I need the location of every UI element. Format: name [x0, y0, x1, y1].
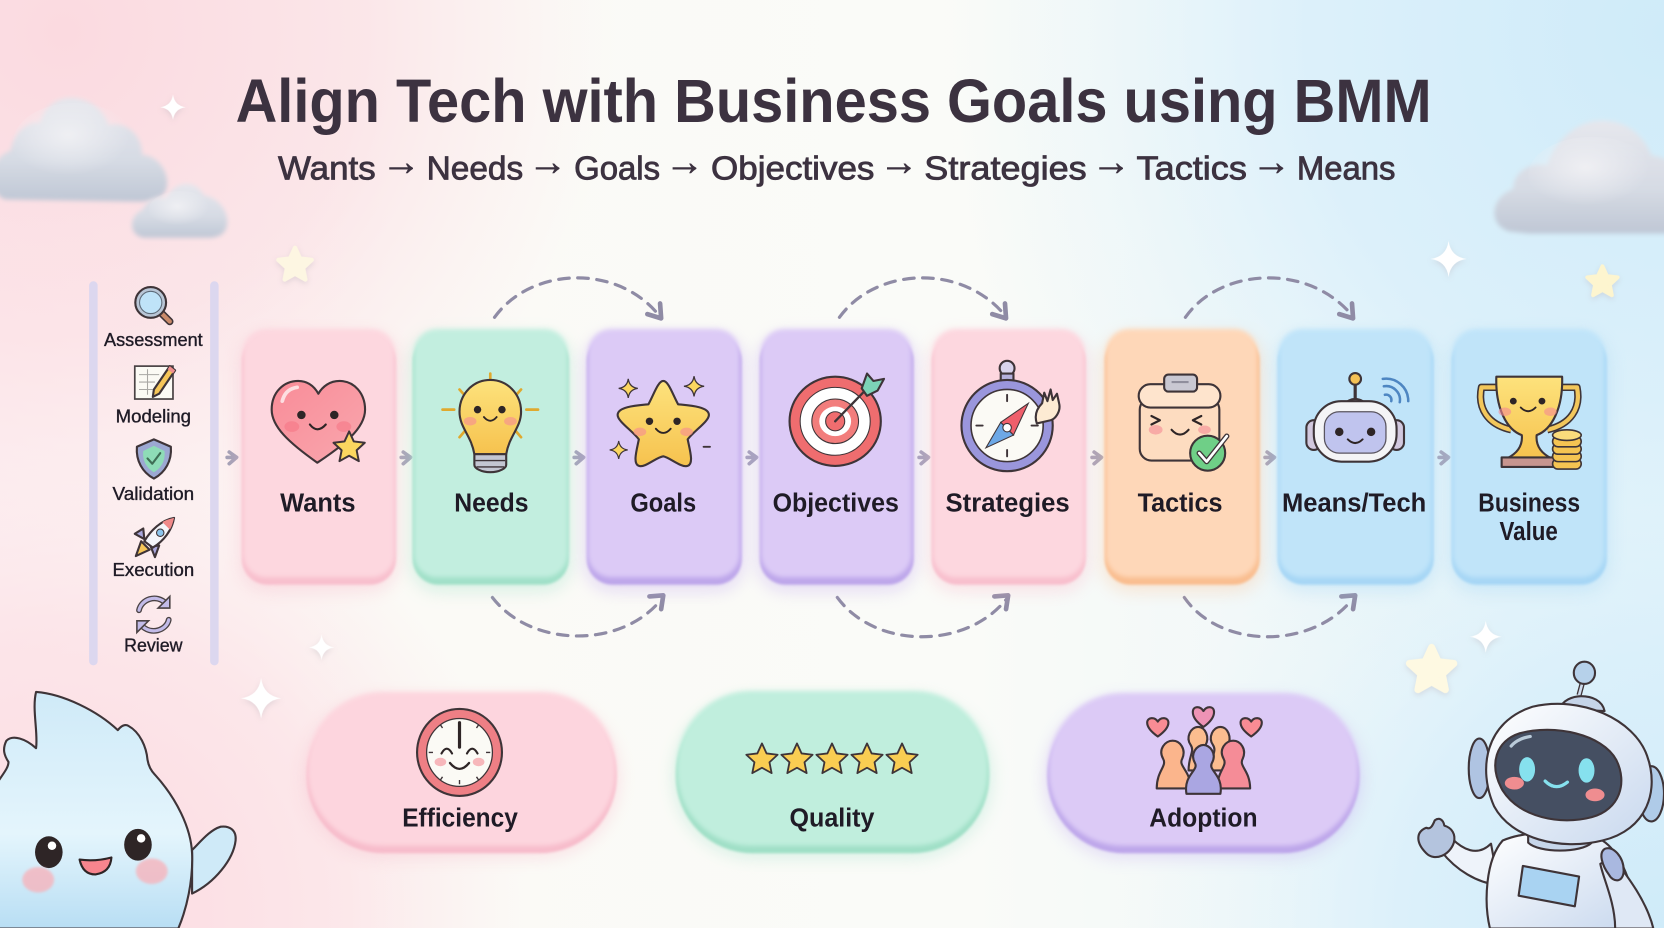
subtitle: chain: → [528, 140, 567, 184]
subtitle: chain: Wants [278, 149, 376, 186]
robot right arm [1600, 857, 1653, 928]
sidebar rails [89, 281, 219, 665]
robot ears [1469, 739, 1490, 798]
label: Means/Tech: Means/Tech [1282, 490, 1426, 518]
icon: shield [137, 439, 171, 479]
label: Tactics: Tactics [1138, 490, 1223, 518]
panel: Needs [411, 329, 571, 591]
drop arm [192, 827, 236, 894]
icon: review cycle [137, 596, 170, 632]
robot screen [1495, 730, 1621, 820]
drop body [0, 692, 192, 928]
icon: star with sparkles [610, 376, 710, 466]
panel: Efficiency [305, 692, 619, 857]
cloud: top left large [0, 98, 167, 202]
drop face [22, 829, 168, 892]
icon: robot with wifi [1306, 373, 1408, 462]
panel: Strategies [930, 329, 1088, 591]
arrow: bottom arc objectives to strategies [837, 595, 1008, 637]
subtitle: chain: Tactics [1137, 149, 1247, 186]
label: Quality: Quality [790, 805, 875, 833]
robot far arm [1441, 838, 1498, 885]
title: Align Tech with Business Goals using BMM [236, 67, 1432, 136]
robot body [1487, 833, 1640, 928]
icon: magnifier [135, 287, 170, 322]
robot antenna [1579, 679, 1583, 695]
panel: sidebar process [89, 281, 219, 665]
panel: Goals [585, 329, 744, 591]
subtitle: chain: Strategies [924, 149, 1087, 186]
label: Efficiency: Efficiency [402, 805, 519, 833]
arrow: top arc tactics to means [1185, 278, 1353, 318]
label: Business Value [1478, 490, 1580, 546]
label: Review: Review [124, 635, 183, 656]
subtitle: chain: → [1252, 140, 1291, 184]
icon: notebook and pencil [135, 366, 175, 399]
robot neck [1528, 830, 1592, 851]
arrow: chevrons between steps [227, 452, 1449, 464]
subtitle: chain [278, 140, 1396, 186]
icon: rocket [135, 518, 174, 557]
subtitle: chain: → [1091, 140, 1131, 184]
label: Assessment: Assessment [104, 329, 204, 350]
arrow: bottom arc needs to goals [492, 595, 663, 636]
panel: Business Value [1450, 329, 1609, 591]
subtitle: chain: → [382, 140, 421, 184]
robot head [1486, 704, 1652, 844]
arrow: top arc objectives to strategies [839, 278, 1006, 318]
panel: Tactics [1103, 329, 1262, 591]
subtitle: chain: Objectives [711, 149, 874, 186]
label: Validation: Validation [112, 483, 194, 504]
robot face [1505, 736, 1605, 801]
icon: heart [272, 381, 365, 463]
subtitle: chain: → [665, 140, 704, 184]
panel: Means/Tech [1276, 329, 1436, 591]
label: Goals: Goals [630, 490, 696, 518]
icon: clipboard with check [1139, 375, 1227, 471]
icon: people with hearts [1147, 707, 1262, 794]
icon: lightbulb [443, 374, 538, 472]
label: Objectives: Objectives [773, 490, 899, 518]
label: Business Value: Value [1500, 518, 1558, 546]
mascot: robot character [1418, 662, 1664, 928]
icon: five stars [746, 743, 918, 773]
icon: smiling clock [417, 709, 502, 796]
label: Strategies: Strategies [946, 490, 1070, 518]
panel: Quality [674, 691, 991, 857]
icon: trophy and coins [1481, 377, 1581, 469]
label: Business Value: Business [1478, 490, 1580, 518]
icon: compass [961, 361, 1060, 471]
label: Execution: Execution [112, 559, 194, 580]
label: Adoption: Adoption [1149, 805, 1258, 833]
panel: Adoption [1045, 693, 1362, 857]
subtitle: chain: Goals [574, 149, 660, 186]
arrow: top arc needs to goals [495, 278, 661, 318]
subtitle: chain: Needs [427, 149, 523, 186]
arrow: bottom arc tactics to means [1184, 595, 1355, 637]
cloud: top right [1494, 120, 1664, 233]
subtitle: chain: → [879, 140, 918, 184]
panel: Objectives [758, 329, 916, 591]
label: Needs: Needs [454, 490, 528, 518]
cloud: top left small [132, 184, 227, 238]
icon: target with arrow [790, 374, 884, 466]
label: Wants: Wants [280, 490, 356, 518]
panel: Wants [240, 329, 398, 591]
label: Modeling: Modeling [116, 405, 191, 426]
subtitle: chain: Means [1297, 149, 1396, 186]
robot hand [1418, 819, 1454, 857]
mascot: water drop character [0, 692, 236, 928]
sparkles and stars decoration [160, 94, 1618, 718]
robot chest panel [1519, 866, 1579, 906]
